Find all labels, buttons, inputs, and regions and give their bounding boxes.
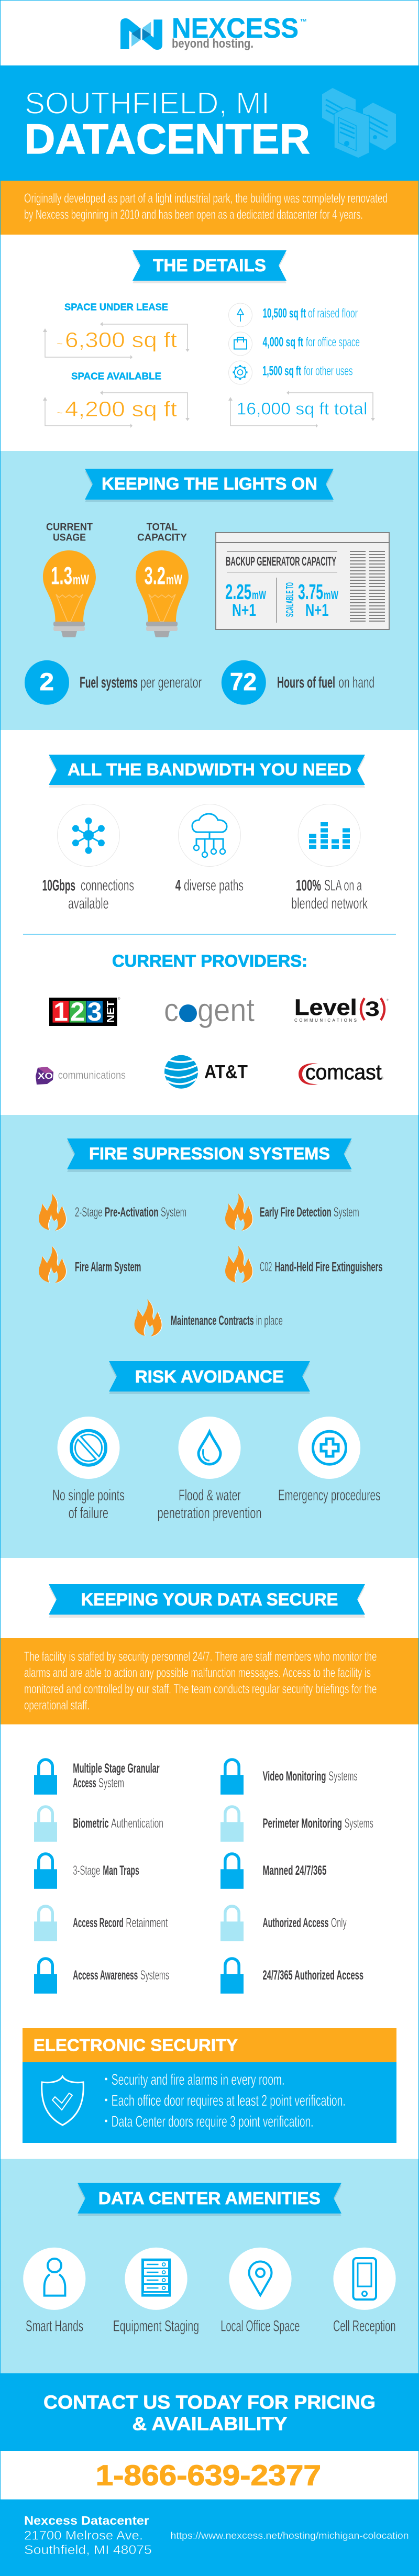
space under lease label: SPACE UNDER LEASE: [64, 302, 168, 312]
item: biometric authentication: Biometric: [73, 1816, 109, 1831]
stat: 72 hours of fuel: 72: [230, 668, 257, 695]
icon: cell phone: [333, 2248, 396, 2310]
item: manned 24/7/365: Manned 24/7/365: [263, 1863, 327, 1878]
stat: 2 fuel systems: [25, 660, 202, 705]
label: 100% SLA: 100%: [296, 877, 321, 894]
icon: shield check: [42, 2076, 83, 2125]
heading ribbon: data security: [49, 1584, 365, 1618]
heading ribbon: fire suppression: FIRE SUPRESSION SYSTEMS: [89, 1144, 330, 1163]
logo: 123NET: 1: [53, 997, 68, 1026]
total capacity label: CAPACITY: [137, 532, 187, 543]
stat: 2 fuel systems: per generator: [140, 674, 202, 691]
item: pre-activation system: Pre-Activation: [105, 1205, 158, 1220]
logo: Level 3: ®: [387, 998, 389, 1002]
2.25 mW N+1: 2.25: [225, 580, 251, 604]
label: 4 diverse paths: 4: [175, 877, 181, 894]
item: early fire detection: [225, 1193, 359, 1231]
contact heading: CONTACT US TODAY FOR PRICING: [43, 2392, 376, 2413]
item: hand-held extinguishers: C02: [260, 1260, 272, 1275]
3.75 mW N+1: [298, 580, 338, 620]
panel: contact: [0, 2373, 419, 2576]
stat: 6300 sq ft: [43, 322, 190, 359]
icon: no single points: [58, 1417, 119, 1479]
3.75 mW N+1: 3.75: [298, 580, 323, 604]
space available label: SPACE AVAILABLE: [71, 371, 161, 382]
heading ribbon: data security: KEEPING YOUR DATA SECURE: [81, 1590, 338, 1609]
office space text: for office space: [306, 335, 360, 350]
item: multiple stage granular access: System: [98, 1776, 124, 1790]
contact heading: [43, 2392, 376, 2434]
stat: 6300 sq ft: 6,300 sq ft: [65, 328, 178, 352]
trademark: TM: [300, 19, 306, 23]
2.25 mW N+1: mW: [252, 588, 266, 602]
icon: water drop: [178, 1417, 241, 1479]
logo: Comcast: comcast: [305, 1060, 382, 1084]
item: early fire detection: System: [334, 1205, 359, 1220]
item: man traps: 3-Stage: [73, 1863, 100, 1878]
item: biometric authentication: [34, 1807, 163, 1842]
label: 100% SLA: blended network: [291, 895, 368, 912]
item: access record retainment: Access Record: [73, 1916, 124, 1930]
2.25 mW N+1: N+1: [232, 601, 256, 620]
item: early fire detection: Early Fire Detection: [260, 1205, 332, 1220]
title line 2: DATACENTER: [25, 116, 310, 163]
bulb: current usage: mW: [73, 572, 89, 588]
other uses text: for other uses: [304, 364, 353, 379]
2.25 mW N+1: [225, 580, 266, 620]
logo: XO communications: XO: [38, 1071, 53, 1081]
item: 24/7/365 authorized access: [220, 1959, 363, 1994]
stat: 4200 sq ft: ~: [57, 407, 63, 419]
contact heading: & AVAILABILITY: [132, 2413, 287, 2434]
logo: 123NET: ®: [118, 997, 120, 1001]
stat: 16000 sq ft total: [228, 391, 375, 428]
item: access record retainment: [34, 1906, 168, 1941]
heading ribbon: the details: [133, 250, 286, 283]
item: fire alarm: Fire Alarm System: [75, 1260, 141, 1275]
total capacity label: [137, 522, 187, 543]
item: authorized access only: Only: [331, 1916, 347, 1930]
item: pre-activation system: [39, 1193, 186, 1231]
panel: backup generator capacity: [216, 533, 389, 629]
raised floor text: 10,500 sq ft: [263, 306, 306, 321]
heading ribbon: fire suppression: [67, 1138, 352, 1172]
bullet list: [105, 2071, 346, 2130]
icon: cloud paths: [178, 804, 241, 866]
logo: Level 3: Level: [294, 995, 357, 1020]
label: 10Gbps connections: available: [68, 895, 109, 912]
providers heading: CURRENT PROVIDERS:: [112, 952, 307, 970]
label: flood prevention: [157, 1487, 262, 1522]
item: maintenance contracts: in place: [256, 1313, 283, 1328]
icon: equipment staging rack: [125, 2248, 188, 2310]
item: hand-held extinguishers: [225, 1246, 382, 1283]
item: perimeter monitoring: Systems: [345, 1816, 373, 1831]
label: 100% SLA: SLA on a: [324, 877, 362, 894]
item: video monitoring: [220, 1760, 358, 1795]
item: fire alarm: [39, 1246, 141, 1283]
heading ribbon: bandwidth: ALL THE BANDWIDTH YOU NEED: [68, 760, 351, 779]
item: perimeter monitoring: [220, 1807, 373, 1842]
icon: office bag: [228, 332, 252, 356]
logo: Level 3: COMMUNICATIONS: [294, 1018, 357, 1023]
label: 10Gbps connections: 10Gbps: [42, 877, 75, 894]
website url: https://www.nexcess.net/hosting/michigan-colocation: [171, 2530, 409, 2541]
item: video monitoring: Systems: [329, 1769, 358, 1784]
logo: XO communications: [36, 1067, 126, 1085]
stat: 2 fuel systems: 2: [40, 668, 54, 695]
tagline: beyond hosting.: [172, 37, 253, 51]
logo wordmark: NEXCESS: [172, 13, 299, 44]
address block: Nexcess Datacenter: [24, 2514, 149, 2527]
security intro band: [0, 1638, 419, 1724]
item: manned 24/7/365: [220, 1854, 327, 1889]
heading ribbon: risk avoidance: RISK AVOIDANCE: [135, 1367, 284, 1386]
logo: Level 3: [294, 995, 389, 1023]
heading ribbon: amenities: [78, 2183, 341, 2216]
icon: location pin: [229, 2248, 292, 2310]
item: authorized access only: Authorized Access: [263, 1916, 329, 1930]
panel: keeping the lights on: [0, 451, 419, 730]
label: local office space: Local Office Space: [220, 2318, 300, 2335]
heading ribbon: amenities: DATA CENTER AMENITIES: [98, 2188, 321, 2208]
panel: hero: [0, 65, 419, 181]
label: flood prevention: Flood & water: [179, 1487, 241, 1504]
label: 4 diverse paths: [175, 877, 244, 894]
item: man traps: [34, 1854, 139, 1889]
bulb: total capacity: mW: [166, 572, 182, 588]
label: no single points of failure: of failure: [69, 1505, 108, 1522]
item: access awareness: Systems: [140, 1968, 169, 1983]
logo: AT&T: AT&T: [204, 1061, 248, 1082]
panel: backup generator capacity: SCALABLE TO: [284, 582, 296, 617]
logo: XO communications: communications: [58, 1069, 126, 1081]
item: multiple stage granular access: Access: [73, 1776, 96, 1790]
heading ribbon: risk avoidance: [109, 1361, 310, 1394]
panel: amenities: [0, 2159, 419, 2373]
icon: network hub: [58, 804, 119, 866]
stat: 72 hours of fuel: Hours of fuel: [277, 674, 335, 691]
label: flood prevention: penetration prevention: [157, 1505, 262, 1522]
stat: 72 hours of fuel: [222, 660, 374, 705]
heading ribbon: keeping the lights on: [85, 469, 334, 502]
item: access awareness: [34, 1959, 169, 1994]
label: smart hands: Smart Hands: [26, 2318, 83, 2335]
item: biometric authentication: Authentication: [111, 1816, 163, 1831]
logo: 123NET: 3: [87, 997, 102, 1026]
logo: 123NET: NET: [105, 1001, 117, 1023]
panel: header: [120, 13, 306, 51]
office space text: [263, 335, 360, 350]
phone number: 1-866-639-2377: [96, 2459, 321, 2492]
label: no single points of failure: No single points: [52, 1487, 125, 1504]
icon: Nexcess logo mark: [120, 18, 162, 50]
icon: medical cross: [298, 1417, 360, 1479]
item: authorized access only: [220, 1906, 347, 1941]
stat: 4200 sq ft: 4,200 sq ft: [65, 397, 178, 421]
bulb: total capacity: 3.2: [145, 562, 166, 590]
logo: cogent: c: [164, 992, 179, 1029]
other uses text: 1,500 sq ft: [262, 364, 301, 379]
stat: 16000 sq ft total: 16,000 sq ft total: [237, 400, 368, 418]
item: pre-activation system: 2-Stage: [75, 1205, 102, 1220]
bullet list: Security and fire alarms in every room.: [112, 2071, 284, 2088]
address block: Southfield, MI 48075: [24, 2543, 152, 2557]
logo: cogent: gent: [197, 992, 255, 1029]
icon: smart hands person: [23, 2248, 85, 2310]
item: man traps: Man Traps: [103, 1863, 139, 1878]
panel: data security: [0, 1584, 419, 2143]
label: no single points of failure: [52, 1487, 125, 1522]
item: maintenance contracts: [135, 1299, 283, 1336]
panel: electronic security: [23, 2028, 396, 2143]
stat: 6300 sq ft: ~: [57, 338, 63, 350]
title line 1: SOUTHFIELD, MI: [25, 86, 270, 120]
panel: bandwidth: [23, 755, 396, 1089]
item: access awareness: Access Awareness: [73, 1968, 138, 1983]
label: 10Gbps connections: [42, 877, 134, 912]
current usage label: [46, 522, 93, 543]
logo: Level 3: 3: [365, 998, 380, 1021]
3.75 mW N+1: N+1: [305, 601, 329, 620]
item: multiple stage granular access: [34, 1760, 160, 1795]
raised floor text: of raised floor: [308, 306, 358, 321]
label: 100% SLA: [291, 877, 368, 912]
stat: 72 hours of fuel: on hand: [338, 674, 374, 691]
total capacity label: TOTAL: [147, 522, 178, 533]
panel: intro band: [0, 181, 419, 235]
vent stripes: [350, 551, 385, 621]
panel: fire and risk: [0, 1115, 419, 1558]
logo: Comcast: ®: [381, 1076, 384, 1080]
current usage label: USAGE: [53, 532, 86, 543]
office space text: 4,000 sq ft: [263, 335, 303, 350]
security intro band: operational staff.: [24, 1698, 90, 1712]
heading ribbon: keeping the lights on: KEEPING THE LIGHTS ON: [102, 474, 317, 493]
address block: 21700 Melrose Ave.: [24, 2528, 143, 2542]
bullet list: Data Center doors require 3 point verification.: [112, 2113, 314, 2130]
3.75 mW N+1: mW: [324, 588, 338, 602]
logo: AT&T: [164, 1055, 248, 1089]
logo: cogent: [164, 992, 255, 1029]
bulb: total capacity: [136, 550, 189, 637]
stat: 4200 sq ft: [43, 391, 190, 428]
item: pre-activation system: System: [161, 1205, 186, 1220]
item: perimeter monitoring: Perimeter Monitoring: [263, 1816, 342, 1831]
logo: 123NET: [49, 997, 120, 1026]
item: video monitoring: Video Monitoring: [263, 1769, 326, 1784]
heading ribbon: bandwidth: [49, 755, 365, 788]
current usage label: CURRENT: [46, 522, 93, 533]
bulb: current usage: 1.3: [51, 562, 72, 590]
label: 10Gbps connections: connections: [81, 877, 134, 894]
stat: 2 fuel systems: Fuel systems: [80, 674, 138, 691]
heading ribbon: the details: THE DETAILS: [153, 256, 266, 275]
label: 4 diverse paths: diverse paths: [184, 877, 244, 894]
intro text: [24, 191, 388, 222]
icon: equalizer bars: [298, 804, 360, 866]
icon: servers: [322, 88, 396, 158]
logo: 123NET: 2: [70, 997, 85, 1026]
bulb: current usage: [43, 550, 96, 637]
item: maintenance contracts: Maintenance Contracts: [171, 1313, 254, 1328]
label: equipment staging: Equipment Staging: [113, 2318, 199, 2335]
item: access record retainment: Retainment: [126, 1916, 168, 1930]
panel: the details: [43, 250, 375, 428]
address block: [24, 2514, 152, 2557]
icon: raised floor arrow: [228, 303, 252, 327]
item: multiple stage granular access: Multiple Stage Granular: [73, 1761, 160, 1776]
icon: gear: [228, 361, 252, 384]
electronic security title: ELECTRONIC SECURITY: [34, 2036, 238, 2055]
